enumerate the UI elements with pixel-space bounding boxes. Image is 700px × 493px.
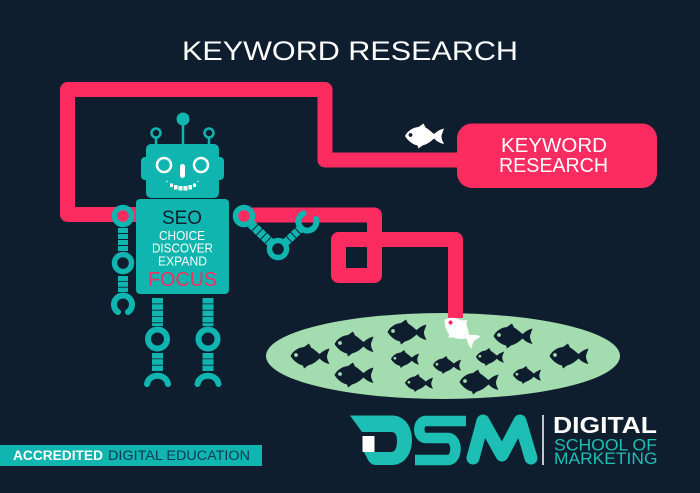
logo white square <box>362 436 374 452</box>
logo wordmark: SCHOOL OF <box>554 437 657 455</box>
icon: white fish above line <box>405 124 444 148</box>
robot body with labels: DISCOVER <box>152 242 213 256</box>
keyword research box <box>457 124 657 188</box>
logo mark M <box>473 421 531 458</box>
accreditation banner: DIGITAL EDUCATION <box>108 448 250 463</box>
keyword research box: KEYWORD <box>501 135 607 157</box>
robot right leg <box>198 298 218 384</box>
robot body with labels: CHOICE <box>159 229 205 243</box>
robot body with labels <box>136 199 229 294</box>
robot left leg <box>147 298 168 384</box>
robot left arm <box>114 208 132 312</box>
robot antennas <box>152 112 214 146</box>
fishing line: upper route to keyword box <box>68 90 470 214</box>
logo wordmark: DIGITAL <box>553 412 657 438</box>
logo mark S <box>415 421 466 460</box>
robot body with labels: FOCUS <box>148 269 217 291</box>
title: KEYWORD RESEARCH <box>182 36 518 66</box>
robot <box>114 112 316 384</box>
logo divider <box>542 415 544 465</box>
robot head <box>141 144 224 198</box>
fishing line: lower route into pond <box>243 215 456 318</box>
robot right arm <box>236 208 316 258</box>
accreditation banner <box>0 445 262 466</box>
logo mark D <box>350 416 412 465</box>
pond of fish <box>266 313 620 399</box>
robot body with labels: EXPAND <box>158 254 207 268</box>
icon: caught white fish on hook <box>437 309 484 353</box>
keyword research box: RESEARCH <box>499 155 608 177</box>
logo wordmark: MARKETING <box>554 450 658 468</box>
logo wordmark <box>553 412 658 468</box>
DSM logo <box>350 412 658 468</box>
robot body with labels: SEO <box>162 208 202 229</box>
accreditation banner: ACCREDITED <box>13 448 103 463</box>
